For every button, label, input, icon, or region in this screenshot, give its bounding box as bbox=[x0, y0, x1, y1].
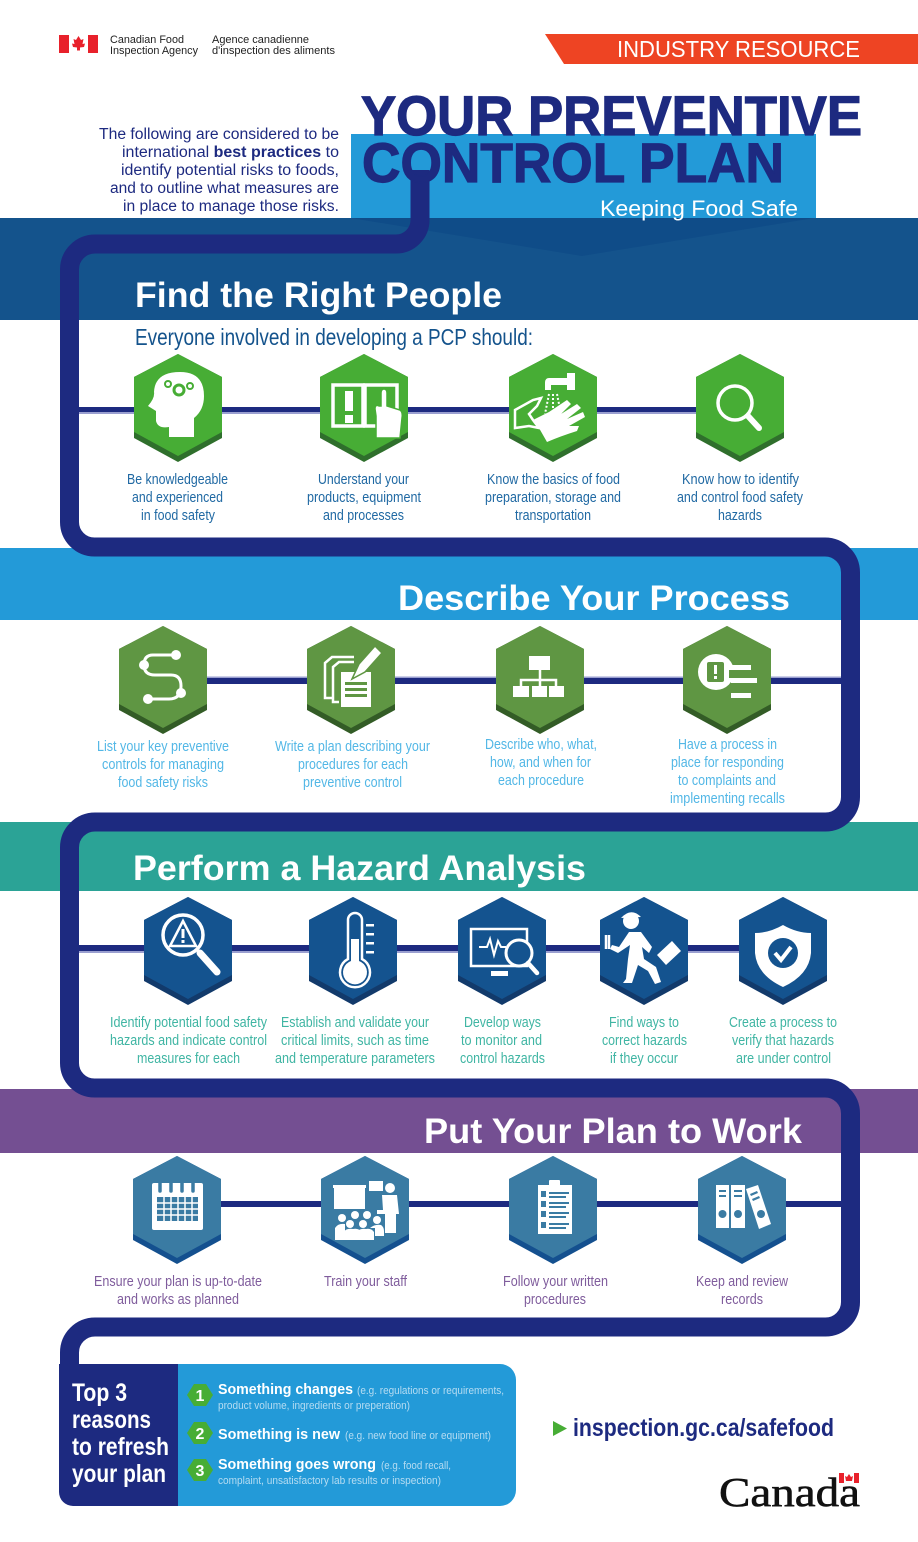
banner: industry resource bbox=[545, 34, 918, 64]
step: ensure plan up to date bbox=[94, 1156, 262, 1308]
government of canada agency signature: Canadian Food bbox=[110, 34, 184, 46]
title: CONTROL PLAN bbox=[362, 131, 784, 194]
reason 3 bbox=[187, 1456, 451, 1487]
title background box bbox=[351, 134, 816, 218]
caption: hazards and indicate control bbox=[110, 1032, 267, 1049]
caption bbox=[602, 1014, 687, 1067]
caption: and works as planned bbox=[117, 1291, 239, 1308]
reason 1: 1 bbox=[196, 1388, 205, 1405]
reason 2: 2 bbox=[196, 1426, 205, 1443]
caption: Train your staff bbox=[324, 1273, 408, 1290]
government of canada agency signature: Inspection Agency bbox=[110, 45, 198, 57]
reason 1 bbox=[187, 1381, 504, 1412]
caption bbox=[696, 1273, 788, 1308]
step: keep records bbox=[696, 1156, 788, 1308]
hexagon badge and monitor icon bbox=[458, 897, 546, 1005]
caption: correct hazards bbox=[602, 1032, 687, 1049]
section band: find the right people bbox=[0, 218, 918, 320]
caption bbox=[460, 1014, 545, 1067]
caption: food safety risks bbox=[118, 774, 208, 791]
hexagon badge and binders icon bbox=[698, 1156, 786, 1264]
caption: Know the basics of food bbox=[487, 471, 620, 488]
caption: each procedure bbox=[498, 772, 584, 789]
connector: row 1 bbox=[69, 407, 740, 414]
panel: describe your process bbox=[97, 579, 790, 807]
caption bbox=[485, 471, 621, 524]
caption bbox=[670, 736, 785, 807]
reason 2: (e.g. new food line or equipment) bbox=[345, 1430, 491, 1442]
caption: are under control bbox=[736, 1050, 831, 1067]
hexagon badge and worker icon bbox=[600, 897, 688, 1005]
caption: records bbox=[721, 1291, 763, 1308]
reason 3: 3 bbox=[196, 1463, 205, 1480]
intro text: in place to manage those risks. bbox=[123, 198, 339, 215]
caption: Develop ways bbox=[464, 1014, 541, 1031]
canada wordmark: Canada bbox=[719, 1469, 860, 1515]
reason 1: Something changes bbox=[218, 1381, 353, 1398]
caption: products, equipment bbox=[307, 489, 422, 506]
panel: top 3 reasons bbox=[59, 1364, 516, 1506]
caption: and control food safety bbox=[677, 489, 803, 506]
winding navy path bbox=[70, 170, 850, 1372]
caption: Find ways to bbox=[609, 1014, 679, 1031]
navy label box: to refresh bbox=[72, 1433, 169, 1461]
caption: Create a process to bbox=[729, 1014, 837, 1031]
navy label box: reasons bbox=[72, 1406, 151, 1434]
caption: Keep and review bbox=[696, 1273, 788, 1290]
panel: put your plan to work bbox=[94, 1112, 803, 1308]
caption: Understand your bbox=[318, 471, 409, 488]
title: YOUR PREVENTIVE bbox=[361, 84, 862, 147]
step: correct hazards bbox=[600, 897, 688, 1067]
intro text bbox=[99, 126, 339, 215]
step: train your staff bbox=[321, 1156, 409, 1290]
subheading: Everyone involved in developing a PCP should: bbox=[135, 324, 533, 350]
caption: transportation bbox=[515, 507, 591, 524]
subtitle: Keeping Food Safe bbox=[600, 196, 798, 221]
caption: Be knowledgeable bbox=[127, 471, 228, 488]
title bbox=[361, 84, 862, 194]
caption: implementing recalls bbox=[670, 790, 785, 807]
caption: List your key preventive bbox=[97, 738, 229, 755]
section band: put your plan to work bbox=[0, 1089, 918, 1153]
caption bbox=[307, 471, 422, 524]
hexagon badge and hand washing icon bbox=[509, 354, 597, 462]
reasons background bbox=[170, 1364, 516, 1506]
navy label box: Top 3 bbox=[72, 1379, 127, 1407]
caption: Identify potential food safety bbox=[110, 1014, 267, 1031]
caption: measures for each bbox=[137, 1050, 240, 1067]
caption: controls for managing bbox=[102, 756, 224, 773]
heading: Put Your Plan to Work bbox=[424, 1112, 803, 1151]
government of canada agency signature: Agence canadienne bbox=[212, 34, 309, 46]
hexagon badge and training icon bbox=[321, 1156, 409, 1264]
hexagon badge and warning magnifier icon bbox=[144, 897, 232, 1005]
hexagon badge and book icon bbox=[320, 354, 408, 462]
connector: row 3 bbox=[69, 945, 783, 953]
step: identify hazards bbox=[677, 354, 803, 524]
intro text: identify potential risks to foods, bbox=[121, 162, 339, 179]
reason 3: Something goes wrong bbox=[218, 1456, 376, 1473]
caption: and experienced bbox=[132, 489, 223, 506]
caption: procedures bbox=[524, 1291, 586, 1308]
caption bbox=[677, 471, 803, 524]
caption bbox=[729, 1014, 837, 1067]
caption: critical limits, such as time bbox=[281, 1032, 429, 1049]
caption: to complaints and bbox=[678, 772, 776, 789]
caption: preparation, storage and bbox=[485, 489, 621, 506]
caption bbox=[127, 471, 228, 524]
step: follow written procedures bbox=[503, 1156, 608, 1308]
navy label box bbox=[59, 1364, 178, 1506]
caption: to monitor and bbox=[461, 1032, 542, 1049]
caption: Describe who, what, bbox=[485, 736, 597, 753]
caption bbox=[97, 738, 229, 791]
hexagon badge and clipboard icon bbox=[509, 1156, 597, 1264]
hexagon badge and head icon bbox=[134, 354, 222, 462]
hexagon badge and shield icon bbox=[739, 897, 827, 1005]
step: identify food safety hazards bbox=[110, 897, 267, 1067]
caption: Ensure your plan is up-to-date bbox=[94, 1273, 262, 1290]
caption: place for responding bbox=[671, 754, 784, 771]
intro text: The following are considered to be bbox=[99, 126, 339, 143]
caption bbox=[94, 1273, 262, 1308]
hexagon badge and documents with pen icon bbox=[307, 626, 395, 734]
reason 2: Something is new bbox=[218, 1426, 340, 1443]
caption: Write a plan describing your bbox=[275, 738, 430, 755]
hexagon badge and route icon bbox=[119, 626, 207, 734]
caption bbox=[275, 738, 430, 791]
caption: Have a process in bbox=[678, 736, 777, 753]
intro text: and to outline what measures are bbox=[110, 180, 339, 197]
reason 1: (e.g. regulations or requirements, bbox=[357, 1385, 504, 1397]
caption: preventive control bbox=[303, 774, 402, 791]
government of canada agency signature bbox=[59, 34, 335, 57]
step: establish critical limits bbox=[275, 897, 435, 1067]
panel: perform a hazard analysis bbox=[110, 849, 837, 1067]
caption bbox=[485, 736, 597, 789]
hexagon badge and thermometer icon bbox=[309, 897, 397, 1005]
caption: in food safety bbox=[141, 507, 215, 524]
reason 2 bbox=[187, 1422, 491, 1444]
step: process for recalls bbox=[670, 626, 785, 807]
caption: hazards bbox=[718, 507, 762, 524]
hexagon badge and alert icon bbox=[683, 626, 771, 734]
step: understand products bbox=[307, 354, 422, 524]
banner: industry resource: INDUSTRY RESOURCE bbox=[617, 36, 860, 62]
caption: control hazards bbox=[460, 1050, 545, 1067]
connector: row 4 bbox=[177, 1201, 850, 1207]
caption: Establish and validate your bbox=[281, 1014, 429, 1031]
navy label box: your plan bbox=[72, 1460, 166, 1488]
panel: find the right people bbox=[127, 276, 803, 524]
heading: Find the Right People bbox=[135, 276, 502, 315]
caption bbox=[503, 1273, 608, 1308]
step: verify hazards bbox=[729, 897, 837, 1067]
reason 3: (e.g. food recall, bbox=[381, 1460, 451, 1472]
caption: how, and when for bbox=[490, 754, 591, 771]
step: write a plan bbox=[275, 626, 430, 791]
connector: row 2 bbox=[163, 676, 850, 684]
caption: if they occur bbox=[610, 1050, 678, 1067]
section band: perform a hazard analysis bbox=[0, 822, 918, 891]
section band: describe your process bbox=[0, 548, 918, 620]
heading: Perform a Hazard Analysis bbox=[133, 849, 586, 888]
caption: and processes bbox=[323, 507, 404, 524]
step: know food basics bbox=[485, 354, 621, 524]
caption: procedures for each bbox=[298, 756, 408, 773]
caption: verify that hazards bbox=[732, 1032, 834, 1049]
step: be knowledgeable bbox=[127, 354, 228, 524]
hexagon badge and org chart icon bbox=[496, 626, 584, 734]
hexagon badge and calendar icon bbox=[133, 1156, 221, 1264]
caption bbox=[275, 1014, 435, 1067]
step: describe who what how bbox=[485, 626, 597, 789]
caption: Know how to identify bbox=[682, 471, 799, 488]
reason 1: product volume, ingredients or preperation) bbox=[218, 1400, 410, 1412]
website link: inspection.gc.ca/safefood bbox=[573, 1414, 834, 1442]
caption: and temperature parameters bbox=[275, 1050, 435, 1067]
intro text: international best practices to bbox=[122, 144, 339, 161]
reason 3: complaint, unsatisfactory lab results or inspection) bbox=[218, 1475, 441, 1487]
caption bbox=[110, 1014, 267, 1067]
heading: Describe Your Process bbox=[398, 579, 790, 618]
step: develop monitoring bbox=[458, 897, 546, 1067]
government of canada agency signature: d'inspection des aliments bbox=[212, 45, 335, 57]
step: list preventive controls bbox=[97, 626, 229, 791]
hexagon badge and magnifier icon bbox=[696, 354, 784, 462]
caption: Follow your written bbox=[503, 1273, 608, 1290]
